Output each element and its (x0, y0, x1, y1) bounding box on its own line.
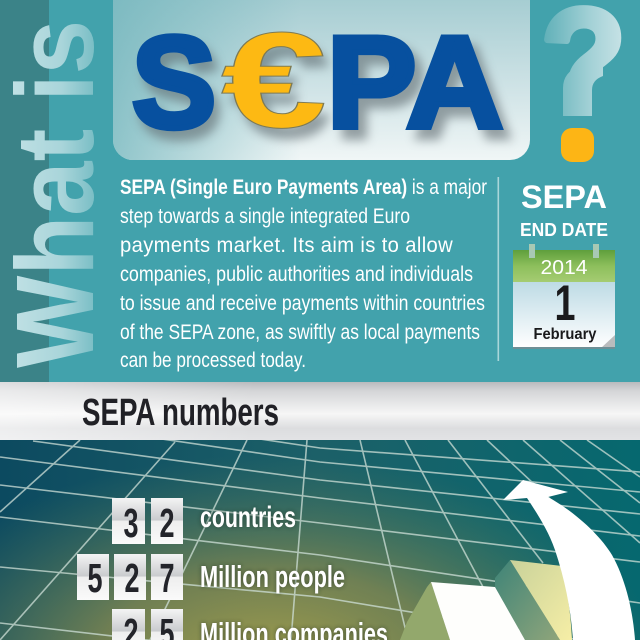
text block: SEPA description: companies, public authorities and individuals (120, 262, 473, 286)
heading: SEPA end date: SEPA (521, 179, 607, 215)
heading band: SEPA numbers (0, 382, 640, 440)
panel: perspective grid background (0, 430, 640, 640)
stat: 527 million people (77, 554, 345, 601)
text block: SEPA description: can be processed today. (120, 348, 306, 372)
icon: calendar 1 February 2014: 2014 (540, 257, 588, 279)
icon: calendar 1 February 2014: 1 (554, 275, 576, 331)
logo letter S: S (132, 9, 216, 155)
text block: SEPA description: step towards a single integrated Euro (120, 204, 410, 228)
text block: SEPA description: of the SEPA zone, as swiftly as local payments (120, 320, 480, 344)
divider (498, 177, 499, 361)
stat: 32 countries (112, 498, 296, 546)
text block: SEPA description: payments market. Its aim is to allow (120, 233, 454, 257)
stat: 527 million people: Million people (200, 559, 345, 594)
rising arrow (503, 480, 635, 640)
stat: 527 million people: Million people (200, 559, 345, 594)
panel: SEPA logo: € (229, 15, 333, 167)
dark left strip (0, 0, 49, 382)
text block: SEPA description: to issue and receive payments within countries (120, 291, 485, 315)
text block: SEPA description (120, 175, 487, 372)
stat: 527 million people: 2 (124, 555, 140, 601)
stat: 32 countries: 2 (160, 500, 174, 546)
text block: SEPA description: SEPA (Single Euro Payments Area) is a major (120, 175, 487, 199)
heading: SEPA end date (520, 179, 608, 240)
stat: 32 countries: 3 (124, 500, 138, 546)
icon: calendar 1 February 2014 (513, 244, 615, 349)
heading: SEPA end date: END DATE (520, 219, 608, 240)
heading band: SEPA numbers: SEPA numbers (82, 392, 279, 434)
panel: SEPA logo: S (138, 19, 222, 165)
bar chart with rising arrow (400, 480, 635, 640)
icon: calendar 1 February 2014: February (534, 326, 597, 343)
stat: 527 million people: 5 (88, 555, 102, 601)
stat: 527 million people: 7 (160, 555, 174, 601)
stat: 32 countries: countries (200, 501, 296, 534)
panel: SEPA logo (113, 0, 530, 167)
short white bar (400, 582, 525, 640)
stat: 32 countries: countries (200, 501, 296, 534)
logo letters PA: PA (327, 9, 503, 155)
teal background (0, 0, 640, 382)
stat: 25 million companies (112, 609, 388, 640)
tall bar (495, 560, 572, 640)
panel: SEPA logo: PA (336, 19, 511, 165)
logo euro sign: € (221, 4, 327, 156)
